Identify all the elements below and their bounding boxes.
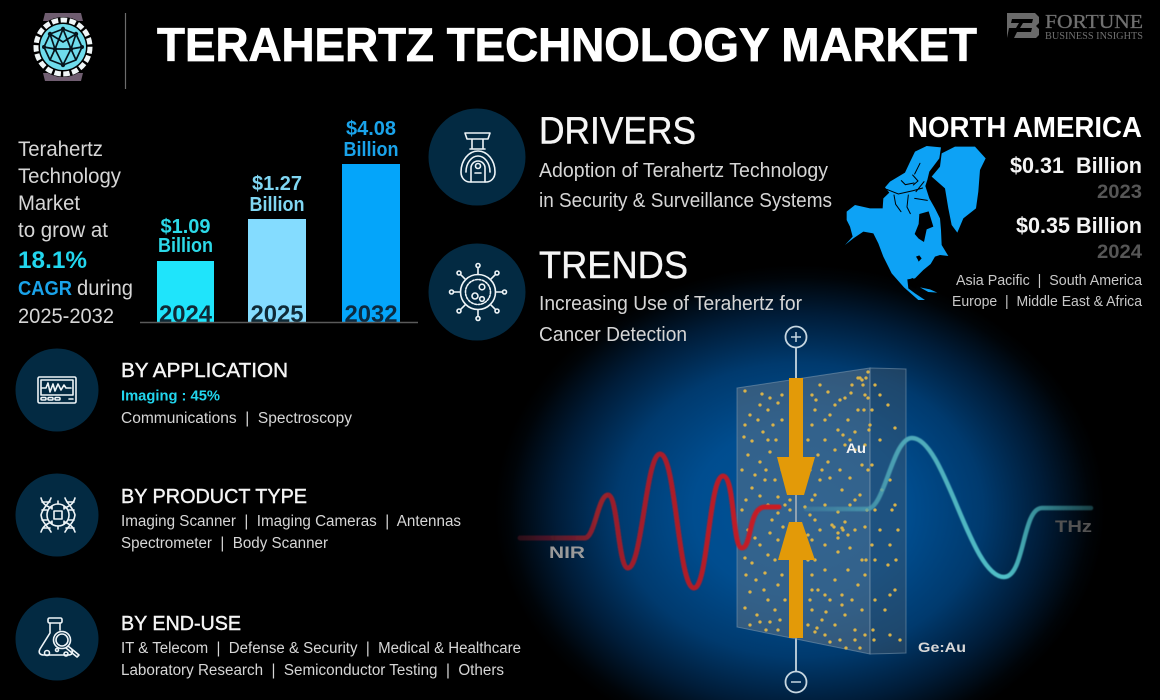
panel: by product type bbox=[16, 474, 461, 556]
icon: DNA with chip bbox=[16, 474, 98, 556]
product segments: Imaging Scanner | Imaging Cameras | Antennas bbox=[121, 513, 461, 530]
end-use segments bbox=[121, 640, 521, 679]
growth statement text: 18.1% bbox=[18, 247, 87, 274]
growth statement text: 2025-2032 bbox=[18, 304, 114, 328]
year 2024: 2024 bbox=[1097, 242, 1142, 263]
heading: trends: TRENDS bbox=[539, 245, 688, 287]
value 2024: $0.35 Billion bbox=[1016, 213, 1142, 238]
growth statement text bbox=[18, 137, 133, 328]
crystal block bbox=[737, 368, 906, 654]
driver description: in Security & Surveillance Systems bbox=[539, 189, 832, 212]
arctic channels bbox=[887, 163, 927, 214]
panel: by end-use bbox=[16, 598, 521, 680]
upper gold electrode arrow bbox=[777, 378, 815, 495]
bar 2032 bbox=[342, 118, 400, 328]
growth statement text: to grow at bbox=[18, 218, 108, 242]
logo: Fortune Business Insights bbox=[1007, 11, 1143, 42]
growth statement text: Technology bbox=[18, 164, 121, 188]
header divider bbox=[124, 13, 126, 89]
end-use segments: Laboratory Research | Semiconductor Testing | Others bbox=[121, 662, 504, 679]
label: THz: THz bbox=[1055, 517, 1092, 536]
heading: by end-use: BY END-USE bbox=[121, 613, 241, 635]
panel: drivers bbox=[428, 108, 832, 212]
bar 2024: $1.09 bbox=[160, 216, 210, 238]
electrode wire with plus and minus terminals bbox=[786, 326, 806, 692]
heading: drivers: DRIVERS bbox=[539, 110, 696, 152]
year 2023: 2023 bbox=[1097, 182, 1142, 203]
growth statement text: during bbox=[77, 276, 133, 300]
logo: Fortune Business Insights: BUSINESS INSIGHTS bbox=[1045, 31, 1143, 42]
bar 2024 bbox=[157, 216, 214, 328]
growth statement text: CAGR bbox=[18, 278, 73, 300]
Hudson Bay and Great Lakes bbox=[908, 211, 933, 289]
heading: by application: BY APPLICATION bbox=[121, 360, 288, 382]
label: Ge:Au: Ge:Au bbox=[918, 639, 966, 655]
map: North America and Greenland bbox=[845, 146, 986, 300]
bar 2032: 2032 bbox=[344, 301, 398, 328]
product segments: Spectrometer | Body Scanner bbox=[121, 535, 328, 552]
label: Au: Au bbox=[846, 440, 866, 456]
bar 2025: Billion bbox=[250, 194, 304, 216]
icon: security camera bbox=[428, 108, 526, 206]
red NIR pulse wave bbox=[520, 454, 779, 588]
icon: lab flask with magnifier bbox=[16, 598, 98, 680]
label: NIR: NIR bbox=[549, 543, 585, 562]
illustration: terahertz photoconductive emitter bbox=[490, 262, 1110, 700]
heading: North America: NORTH AMERICA bbox=[908, 112, 1142, 144]
bar 2032: Billion bbox=[344, 139, 398, 161]
heading: by product type: BY PRODUCT TYPE bbox=[121, 486, 307, 508]
other regions: Europe | Middle East & Africa bbox=[952, 294, 1143, 310]
panel: North America region bbox=[845, 112, 1143, 310]
driver description: Adoption of Terahertz Technology bbox=[539, 159, 829, 182]
bar 2025: 2025 bbox=[250, 301, 304, 328]
panel: trends bbox=[428, 244, 802, 346]
icon: monitor waveform bbox=[16, 348, 98, 432]
lower gold electrode arrow bbox=[778, 522, 815, 638]
product segments bbox=[121, 513, 461, 552]
trend description bbox=[539, 292, 802, 346]
other regions: Asia Pacific | South America bbox=[956, 273, 1143, 289]
bar 2024: Billion bbox=[158, 235, 213, 257]
gold nanoparticles bbox=[742, 372, 900, 648]
bar chart: market size bbox=[140, 118, 418, 328]
growth statement text: Terahertz bbox=[18, 137, 103, 161]
value 2023: $0.31 Billion bbox=[1010, 153, 1142, 178]
leading segment: Imaging : 45% bbox=[121, 388, 220, 404]
end-use segments: IT & Telecom | Defense & Security | Medical & Healthcare bbox=[121, 640, 521, 657]
bar 2024: 2024 bbox=[159, 301, 213, 328]
application segments: Communications | Spectroscopy bbox=[121, 410, 352, 427]
driver description bbox=[539, 159, 832, 212]
title: TERAHERTZ TECHNOLOGY MARKET bbox=[157, 18, 977, 71]
panel: by application bbox=[16, 348, 352, 432]
icon: cancer cell bbox=[428, 244, 526, 340]
logo: Fortune Business Insights: FORTUNE bbox=[1045, 11, 1143, 33]
bar 2032: $4.08 bbox=[346, 118, 396, 140]
teal THz wave bbox=[806, 438, 1091, 577]
other regions bbox=[952, 273, 1143, 310]
icon: terahertz sensor watch bbox=[33, 13, 93, 81]
bar 2025: $1.27 bbox=[252, 173, 302, 195]
trend description: Cancer Detection bbox=[539, 323, 687, 346]
bar 2025 bbox=[248, 173, 306, 328]
trend description: Increasing Use of Terahertz for bbox=[539, 292, 802, 315]
growth statement text: Market bbox=[18, 191, 80, 215]
